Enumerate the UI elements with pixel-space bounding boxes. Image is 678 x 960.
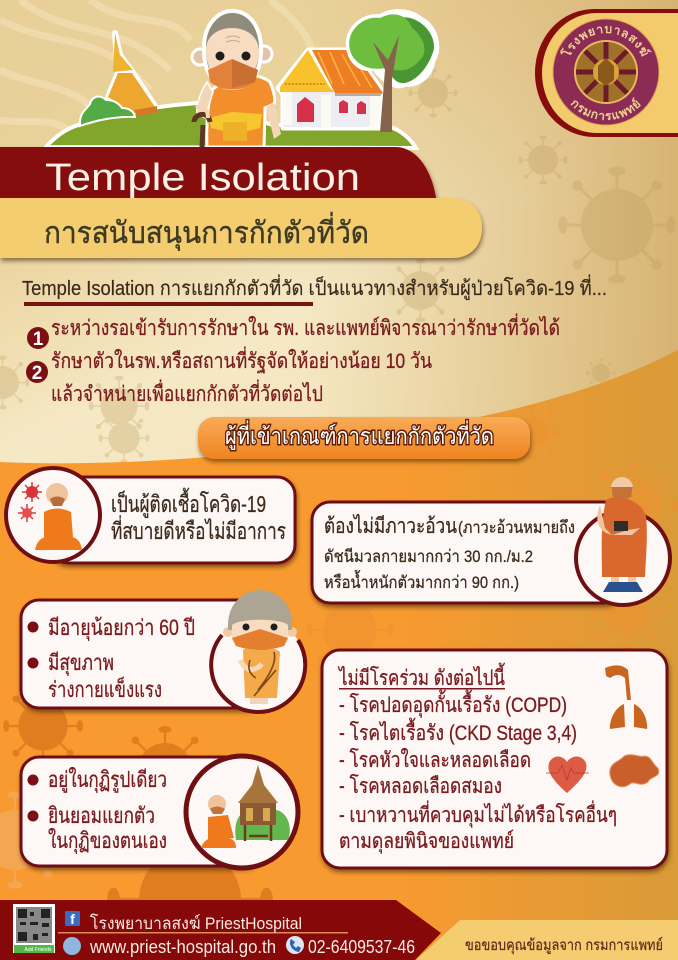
text [28, 615, 195, 702]
number 2 [26, 361, 48, 384]
item 2 text: แล้วจำหน่ายเพื่อแยกกักตัวที่วัดต่อไป [51, 379, 323, 406]
icon: facebook: f [70, 911, 75, 927]
icon: globe [63, 937, 81, 955]
text: - เบาหวานที่ควบคุมไม่ได้หรือโรคอื่นๆ [339, 800, 617, 828]
icon: tree [349, 13, 436, 132]
icon: monk with kuti [186, 756, 298, 868]
text: - โรคไตเรื้อรัง (CKD Stage 3,4) [339, 718, 577, 745]
text: (ภาวะอ้วนหมายถึง [458, 518, 575, 537]
numbered list [26, 313, 560, 406]
phone number: 02-6409537-46 [308, 937, 415, 957]
text: หรือน้ำหนักตัวมากกว่า 90 กก.) [324, 570, 519, 592]
panel: not obese [312, 477, 670, 605]
text: - โรคปอดอุดกั้นเรื้อรัง (COPD) [339, 690, 567, 718]
icon: bush [80, 97, 135, 126]
icon: heart [546, 756, 589, 793]
item 2 text [51, 346, 432, 406]
icon: temple [278, 50, 384, 130]
footer: hospital contact [0, 900, 441, 960]
text [337, 663, 617, 854]
text: ตามดุลยพินิจของแพทย์ [339, 829, 514, 854]
QR code: Add Friends [25, 947, 52, 953]
logo badge [535, 9, 678, 137]
hospital name: โรงพยาบาลสงฆ์ PriestHospital [90, 913, 302, 933]
icon: monk [192, 11, 281, 147]
hill [46, 103, 416, 148]
footer: credit [416, 920, 678, 960]
icon: brain [610, 755, 659, 787]
text: ต้องไม่มีภาวะอ้วน [324, 514, 457, 538]
title banner [0, 147, 436, 205]
intro text: Temple Isolation การแยกกักตัวที่วัด เป็นแนวทางสำหรับผู้ป่วยโควิด-19 ที่... [22, 274, 607, 301]
text [111, 488, 286, 544]
text: ดัชนีมวลกายมากกว่า 30 กก./ม.2 [324, 547, 533, 566]
item 2 text: รักษาตัวในรพ.หรือสถานที่รัฐจัดให้อย่างน้อย 10 วัน [51, 346, 432, 373]
criteria heading pill: ผู้ที่เข้าเกณฑ์การแยกกักตัวที่วัด [225, 420, 494, 450]
panel: infected without symptoms [6, 468, 295, 563]
text: ในกุฏิของตนเอง [48, 828, 167, 854]
panel: age and health [21, 590, 305, 712]
text: - โรคหลอดเลือดสมอง [339, 774, 502, 798]
title: Temple Isolation [45, 157, 360, 199]
logo seal [552, 18, 660, 126]
subtitle banner [0, 198, 482, 258]
text: ไม่มีโรคร่วม ดังต่อไปนี้ [337, 663, 505, 690]
icon: monk on scale [576, 477, 670, 605]
QR code [13, 904, 55, 953]
text: - โรคหัวใจและหลอดเลือด [339, 748, 531, 772]
text [324, 514, 575, 592]
text [28, 767, 167, 854]
number 1: 1 [33, 329, 44, 350]
icon: seated monk [6, 468, 100, 562]
icon: lungs [605, 665, 647, 729]
logo seal: กรมการแพทย์ [570, 96, 641, 120]
criteria heading pill [198, 417, 530, 459]
website: www.priest-hospital.go.th [89, 937, 276, 957]
icon: chedi [108, 33, 157, 116]
text: ที่สบายดีหรือไม่มีอาการ [111, 515, 286, 544]
logo seal: โรงพยาบาลสงฆ์ [560, 26, 652, 57]
icon: masked monk [211, 590, 305, 712]
text: มีสุขภาพ [48, 650, 114, 676]
panel: isolated room [21, 756, 298, 868]
number 1 [27, 327, 49, 350]
text: ร่างกายแข็งแรง [48, 675, 162, 702]
intro text [22, 274, 607, 306]
subtitle: การสนับสนุนการกักตัวที่วัด [44, 212, 369, 252]
icon: phone [286, 936, 304, 954]
panel: no comorbidities [322, 650, 667, 868]
number 2: 2 [32, 363, 42, 384]
text: ยินยอมแยกตัว [48, 803, 155, 828]
icon: facebook [65, 911, 80, 927]
item 1 text: ระหว่างรอเข้ารับการรักษาใน รพ. และแพทย์พิจารณาว่ารักษาที่วัดได้ [51, 313, 560, 340]
text: เป็นผู้ติดเชื้อโควิด-19 [111, 488, 266, 518]
illustration: temple scene with monk [46, 11, 436, 148]
text: มีอายุน้อยกว่า 60 ปี [48, 615, 195, 641]
text: อยู่ในกุฏิรูปเดียว [48, 767, 167, 793]
